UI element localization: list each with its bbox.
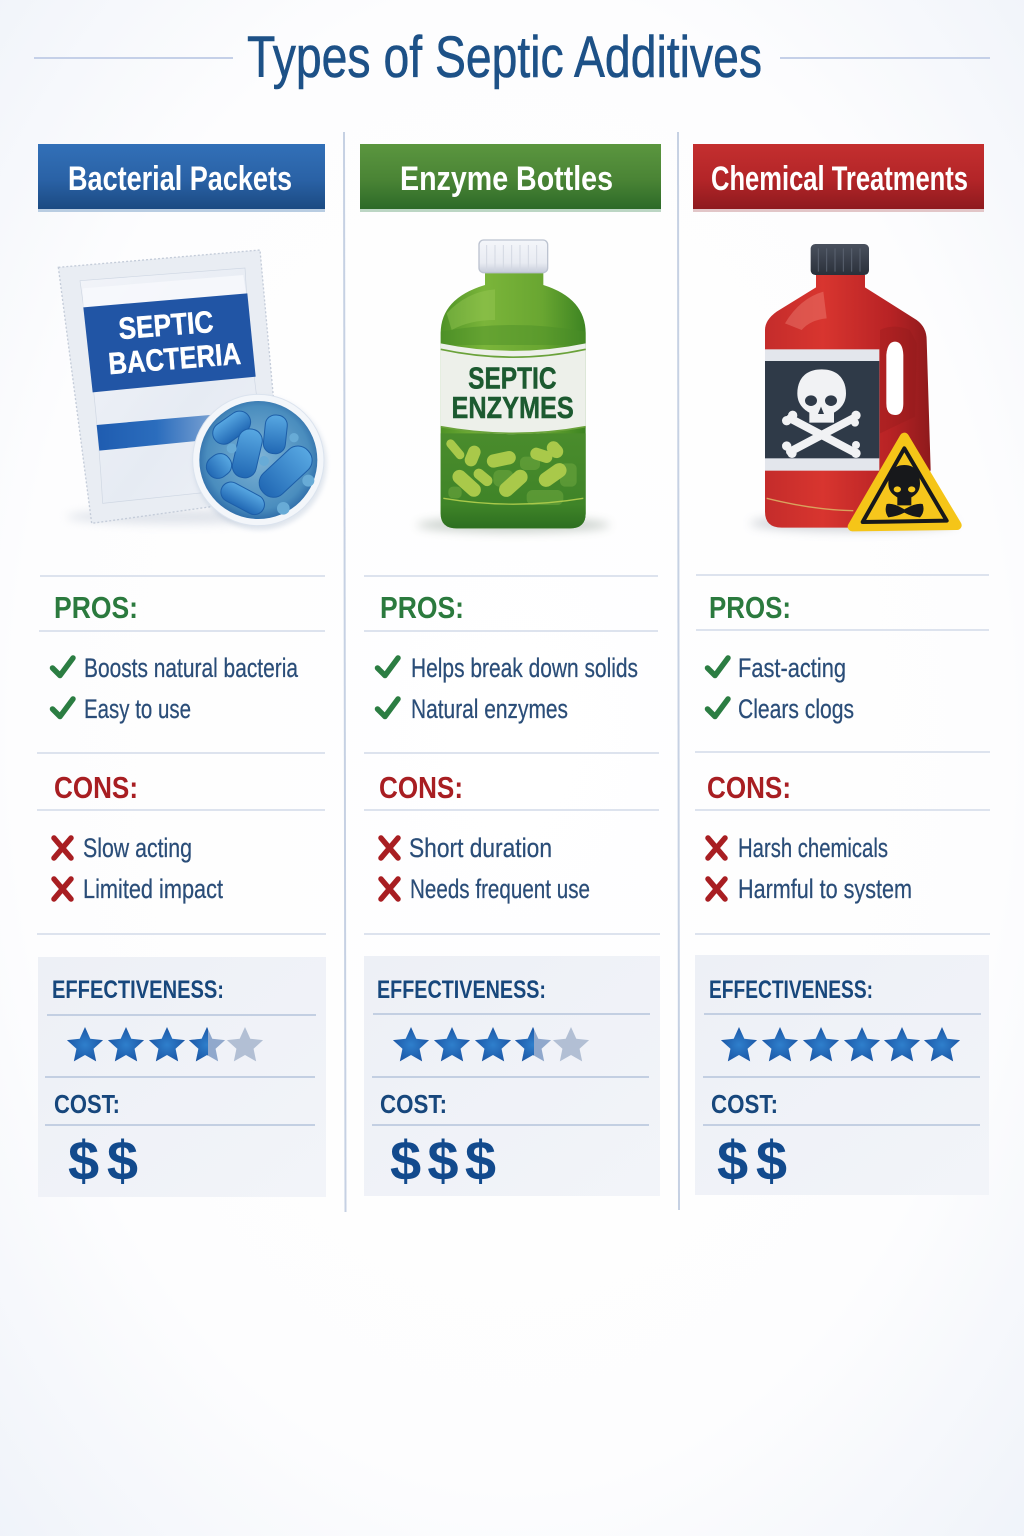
cons list: CONS:	[707, 770, 791, 805]
cons list: Slow acting	[83, 833, 192, 863]
header: Bacterial Packets	[38, 144, 325, 212]
panel: chemical treatments column	[693, 144, 990, 1195]
pros list: Helps break down solids	[411, 653, 638, 683]
icon: septic bacteria packet: BACTERIA	[107, 337, 242, 381]
pros list: Fast-acting	[738, 653, 846, 683]
icon: septic enzymes bottle: ENZYMES	[451, 391, 574, 425]
cons list: Limited impact	[83, 874, 223, 904]
title with side rules: Types of Septic Additives	[247, 25, 762, 90]
ratings panel	[38, 957, 326, 1197]
star rating	[393, 1027, 589, 1061]
cost rating: $$	[717, 1129, 787, 1192]
ratings panel	[695, 955, 989, 1195]
cost rating: $$	[68, 1129, 138, 1192]
cons list: Needs frequent use	[410, 874, 590, 904]
pros list: Boosts natural bacteria	[84, 653, 299, 683]
pros list: Easy to use	[84, 694, 191, 724]
pros list: PROS:	[709, 590, 791, 625]
cons list	[364, 753, 660, 934]
icon: poison jug with warning triangle	[750, 244, 957, 531]
ratings panel: COST:	[54, 1089, 120, 1119]
ratings panel: EFFECTIVENESS:	[52, 976, 224, 1004]
icon: white bottle cap	[479, 240, 548, 273]
pros list	[696, 575, 989, 724]
icon: septic enzymes bottle	[417, 240, 610, 532]
header: Enzyme Bottles: Enzyme Bottles	[400, 160, 613, 198]
header: Chemical Treatments	[693, 144, 984, 212]
icon: septic enzymes bottle: SEPTIC	[468, 362, 556, 396]
star rating	[721, 1027, 960, 1061]
icon: septic bacteria packet: SEPTIC	[117, 305, 215, 346]
icon: warning triangle	[852, 437, 957, 527]
ratings panel: COST:	[711, 1089, 778, 1119]
ratings panel: EFFECTIVENESS:	[709, 976, 873, 1004]
star rating	[67, 1027, 263, 1061]
cons list: CONS:	[54, 770, 138, 805]
cons list	[37, 753, 326, 934]
panel: enzyme bottles column	[360, 144, 661, 1196]
pros list: Clears clogs	[738, 694, 854, 724]
icon: skull and crossbones	[782, 369, 861, 458]
pros list: PROS:	[380, 590, 464, 625]
cons list	[695, 752, 990, 934]
cons list: Harsh chemicals	[738, 833, 888, 863]
cost rating: $$$	[390, 1129, 496, 1192]
ratings panel: EFFECTIVENESS:	[377, 976, 546, 1004]
pros list	[39, 576, 325, 724]
header: Bacterial Packets: Bacterial Packets	[68, 160, 292, 198]
pros list: PROS:	[54, 590, 138, 625]
ratings panel: COST:	[380, 1089, 447, 1119]
panel: bacterial packets column	[37, 144, 327, 1197]
pros list: Natural enzymes	[411, 694, 568, 724]
cons list: CONS:	[379, 770, 463, 805]
cons list: Harmful to system	[738, 874, 912, 904]
icon: septic bacteria packet	[58, 250, 327, 530]
ratings panel	[364, 956, 660, 1196]
icon: bacteria magnifier	[193, 394, 327, 530]
header: Enzyme Bottles	[360, 144, 661, 212]
cons list: Short duration	[409, 833, 552, 863]
pros list	[364, 576, 658, 724]
